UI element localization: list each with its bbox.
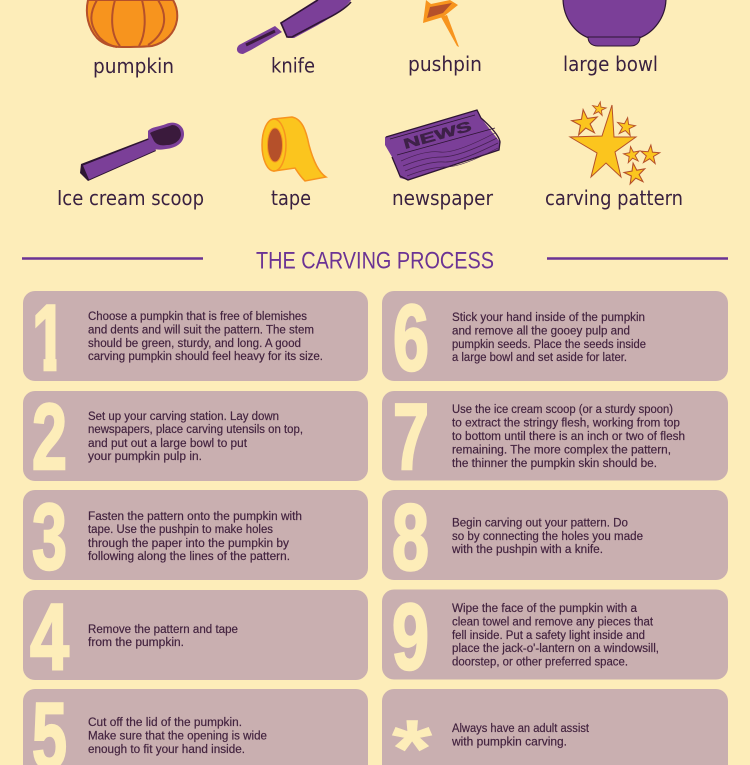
text: step 8: so by connecting the holes you made <box>452 531 643 543</box>
number 8: 8 <box>392 484 429 590</box>
icon: large bowl <box>563 0 666 46</box>
text: step 9: fell inside. Put a safety light inside and <box>452 630 645 642</box>
label: pumpkin: pumpkin <box>93 54 174 78</box>
text: safety note: with pumpkin carving. <box>451 736 567 748</box>
item: large bowl <box>563 0 666 76</box>
panel: step 8 <box>382 484 728 590</box>
text: step 3: Fasten the pattern onto the pumpkin with <box>88 511 302 523</box>
number 7: 7 <box>393 384 429 489</box>
number 9: 9 <box>392 584 429 689</box>
newspaper headline: NEWS <box>402 118 473 152</box>
label: knife: knife <box>271 54 315 78</box>
text: step 7 <box>452 404 685 470</box>
text: step 8: with the pushpin with a knife. <box>451 544 603 556</box>
panel: step 2 <box>23 384 368 489</box>
panel: step 3 <box>23 484 368 589</box>
item: knife <box>237 0 351 78</box>
text: step 5: Cut off the lid of the pumpkin. <box>88 717 242 729</box>
text: step 5 <box>88 717 267 756</box>
text: step 4: from the pumpkin. <box>88 637 184 649</box>
item: pumpkin <box>87 0 177 78</box>
text: step 2: Set up your carving station. Lay down <box>88 411 279 423</box>
panel: step 4 <box>23 584 368 689</box>
text: step 6 <box>452 312 646 364</box>
text: step 1 <box>88 311 323 363</box>
text: step 7: to bottom until there is an inch or two of flesh <box>452 431 685 443</box>
panel: step 5 <box>23 683 368 765</box>
text: step 2: your pumpkin pulp in. <box>88 451 202 463</box>
label: newspaper: newspaper <box>392 186 494 210</box>
icon: pumpkin <box>87 0 177 47</box>
panel: step 7 <box>382 384 728 489</box>
text: step 2: newspapers, place carving utensils on top, <box>88 424 303 436</box>
number 6: 6 <box>393 285 429 390</box>
text: step 7: the thinner the pumpkin skin should be. <box>452 458 657 470</box>
text: step 6: and remove all the gooey pulp and <box>452 326 630 338</box>
text: step 2: and put out a large bowl to put <box>88 438 248 450</box>
panel: step 6 <box>382 285 728 390</box>
text: step 7: Use the ice cream scoop (or a sturdy spoon) <box>452 404 673 416</box>
label: large bowl: large bowl <box>563 52 658 76</box>
text: step 1: and dents and will suit the pattern. The stem <box>88 324 314 336</box>
item: pushpin <box>408 0 482 76</box>
icon: carving pattern stars <box>570 101 660 185</box>
text: step 5: Make sure that the opening is wide <box>88 730 267 742</box>
text: safety note: Always have an adult assist <box>452 723 590 735</box>
number 4: 4 <box>30 584 69 689</box>
text: step 4: Remove the pattern and tape <box>88 624 238 636</box>
label: pushpin: pushpin <box>408 52 482 76</box>
heading: the carving process: THE CARVING PROCESS <box>256 248 494 274</box>
text: step 5: enough to fit your hand inside. <box>88 744 245 756</box>
label: carving pattern: carving pattern <box>545 186 683 210</box>
number 3: 3 <box>32 484 67 589</box>
text: step 8: Begin carving out your pattern. Do <box>452 518 628 530</box>
text: step 6: Stick your hand inside of the pumpkin <box>452 312 645 324</box>
text: step 1: carving pumpkin should feel heavy for its size. <box>88 351 323 363</box>
icon: knife <box>237 0 351 54</box>
text: step 9: place the jack-o'-lantern on a windowsill, <box>452 643 659 655</box>
panel: step 9 <box>382 584 728 689</box>
number 1: 1 <box>32 285 66 390</box>
label: ice cream scoop: Ice cream scoop <box>57 186 204 210</box>
number 2: 2 <box>32 384 67 489</box>
text: step 3: tape. Use the pushpin to make holes <box>88 524 273 536</box>
text: step 3: following along the lines of the pattern. <box>88 551 290 563</box>
label: tape: tape <box>271 186 311 210</box>
text: step 9 <box>452 603 659 668</box>
text: step 1: should be green, sturdy, and long. A good <box>88 338 301 350</box>
text: step 3: through the paper into the pumpkin by <box>88 538 289 550</box>
text: step 6: a large bowl and set aside for later. <box>452 352 627 364</box>
item: ice cream scoop <box>57 123 204 210</box>
text: step 7: remaining. The more complex the pattern, <box>452 444 671 456</box>
text: step 2 <box>88 411 303 463</box>
panel: safety note <box>382 689 728 765</box>
text: step 9: Wipe the face of the pumpkin with a <box>452 603 638 615</box>
icon: pushpin <box>423 0 459 47</box>
icon: ice cream scoop <box>80 123 184 181</box>
text: step 6: pumpkin seeds. Place the seeds inside <box>452 339 646 351</box>
panel: step 1 <box>23 285 368 390</box>
icon: tape <box>262 117 326 181</box>
text: step 8 <box>451 518 643 556</box>
text: step 4 <box>88 624 238 649</box>
text: safety note <box>451 723 590 748</box>
text: step 1: Choose a pumpkin that is free of blemishes <box>88 311 307 323</box>
text: step 3 <box>88 511 302 563</box>
text: step 9: doorstep, or other preferred space. <box>452 656 628 668</box>
item: tape <box>262 117 326 210</box>
text: step 7: to extract the stringy flesh, working from top <box>452 418 680 430</box>
item: carving pattern <box>545 101 683 210</box>
text: step 9: clean towel and remove any pieces that <box>452 616 654 628</box>
item: newspaper <box>385 110 500 210</box>
